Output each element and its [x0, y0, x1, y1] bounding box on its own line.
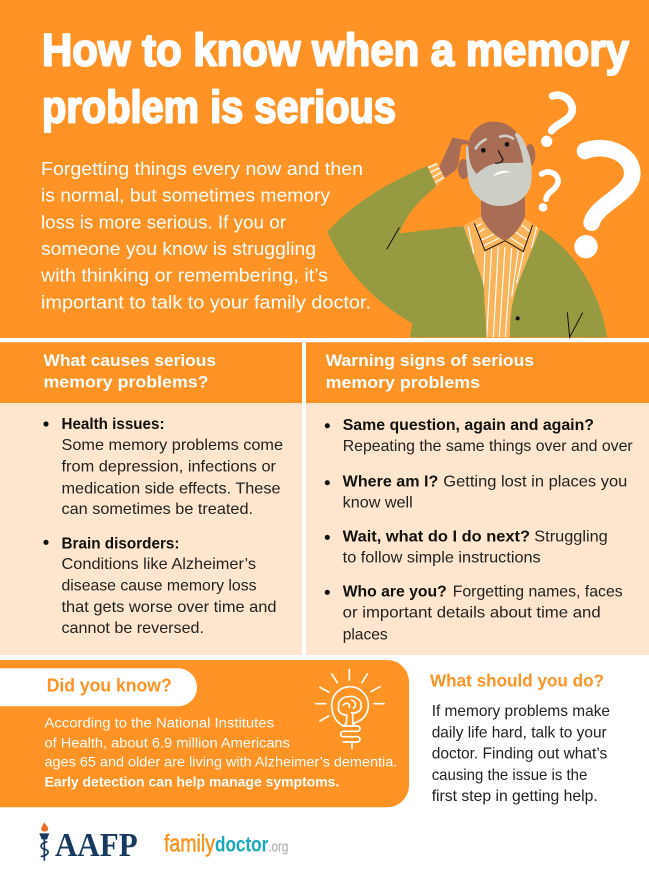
panel: warning signs body: [306, 403, 649, 655]
item: brain disorders: Conditions like Alzheimer’s: [62, 556, 256, 573]
logo: familydoctor.org: family: [164, 831, 215, 858]
did you know text: According to the National Institutes: [44, 716, 274, 731]
item: wait what next: to follow simple instructions: [343, 550, 541, 567]
icon: torch: [39, 822, 49, 861]
logo: AAFP: [39, 822, 138, 864]
intro text: with thinking or remembering, it’s: [40, 265, 328, 286]
item: same question: [325, 417, 633, 455]
icon: middle question mark: [539, 172, 558, 212]
intro text: loss is more serious. If you or: [41, 211, 286, 232]
heading: warning signs: Warning signs of serious: [326, 351, 534, 370]
eyebrows: [476, 136, 513, 148]
logo: familydoctor.org: .org: [268, 839, 288, 856]
intro text: Forgetting things every now and then: [41, 158, 363, 179]
divider band: [0, 342, 649, 403]
item: where am I: [325, 474, 627, 512]
panel: what should you do: doctor. Finding out what’s: [432, 745, 607, 762]
nose: [496, 151, 503, 163]
intro text: important to talk to your family doctor.: [41, 291, 371, 312]
pill: did you know heading: [0, 668, 197, 706]
item: health issues: Health issues:: [62, 416, 164, 433]
item: who are you: Forgetting names, faces: [453, 584, 623, 601]
icon: light bulb with brain: [316, 669, 384, 748]
heading: causes: [44, 351, 216, 392]
item: wait what next: Struggling: [534, 529, 608, 546]
intro text: someone you know is struggling: [41, 238, 316, 259]
item: same question: Same question, again and again?: [343, 417, 594, 434]
item: who are you: or important details about time and: [343, 605, 601, 622]
pill: did you know heading: Did you know?: [47, 676, 172, 696]
panel: what should you do: daily life hard, talk to your: [432, 724, 607, 741]
heading: warning signs: [326, 351, 534, 392]
panel: what should you do: [430, 671, 610, 805]
item: health issues: Some memory problems come: [62, 437, 283, 454]
title: problem is serious: [42, 82, 396, 132]
item: brain disorders: cannot be reversed.: [62, 620, 204, 637]
heading: warning signs: memory problems: [326, 373, 480, 392]
did you know text: ages 65 and older are living with Alzheimer’s dementia.: [44, 755, 397, 770]
intro text: [40, 158, 371, 312]
item: brain disorders: Brain disorders:: [62, 535, 180, 552]
collar: [474, 217, 533, 252]
item: where am I: Where am I?: [343, 474, 438, 491]
panel: what should you do: What should you do?: [430, 671, 604, 691]
hand: [439, 137, 469, 178]
panel: causes body: [0, 403, 302, 655]
item: who are you: Who are you?: [343, 584, 447, 601]
logo: AAFP: AAFP: [55, 827, 138, 864]
item: health issues: can sometimes be treated.: [62, 501, 253, 518]
heading: causes: memory problems?: [44, 372, 208, 392]
item: health issues: from depression, infections or: [62, 459, 277, 476]
column divider: [302, 342, 306, 655]
panel: did you know: [0, 660, 409, 807]
panel: what should you do: first step in getting help.: [432, 788, 598, 805]
title: [42, 24, 630, 132]
did you know text: of Health, about 6.9 million Americans: [44, 736, 290, 751]
illustration: thinking man with question marks: [327, 95, 632, 337]
head: [458, 122, 535, 206]
beard: [466, 133, 532, 206]
did you know text: Early detection can help manage symptoms.: [44, 775, 339, 790]
intro text: is normal, but sometimes memory: [41, 185, 331, 206]
list: warning signs: [325, 417, 633, 643]
cardigan details: [387, 227, 583, 337]
item: wait what next: Wait, what do I do next?: [343, 529, 530, 546]
logo: familydoctor.org: [164, 831, 288, 858]
panel: what should you do: If memory problems make: [432, 703, 610, 720]
item: wait what next: [325, 529, 608, 567]
item: brain disorders: [43, 535, 277, 637]
green cardigan left: [327, 166, 487, 337]
list: causes: [43, 416, 283, 637]
item: brain disorders: disease cause memory loss: [62, 578, 256, 595]
cuff: [427, 162, 445, 186]
eyes: [481, 142, 509, 153]
did you know text: [44, 716, 397, 790]
logo: familydoctor.org: doctor: [215, 834, 268, 857]
item: health issues: medication side effects. These: [62, 480, 281, 497]
panel: orange header: [0, 0, 649, 338]
icon: large question mark: [574, 148, 632, 258]
panel: what should you do: causing the issue is the: [432, 767, 587, 784]
shirt: [463, 217, 540, 337]
icon: top question mark: [541, 95, 572, 147]
item: who are you: places: [343, 626, 388, 643]
item: brain disorders: that gets worse over time and: [62, 599, 276, 616]
mouth highlight: [493, 171, 511, 177]
heading: causes: What causes serious: [44, 351, 216, 370]
item: who are you: [325, 584, 623, 643]
neck: [481, 193, 525, 241]
item: health issues: [43, 416, 283, 518]
item: where am I: Getting lost in places you: [443, 474, 627, 491]
item: same question: Repeating the same things over and over: [343, 438, 633, 455]
green cardigan right: [510, 229, 607, 337]
item: where am I: know well: [343, 495, 413, 512]
